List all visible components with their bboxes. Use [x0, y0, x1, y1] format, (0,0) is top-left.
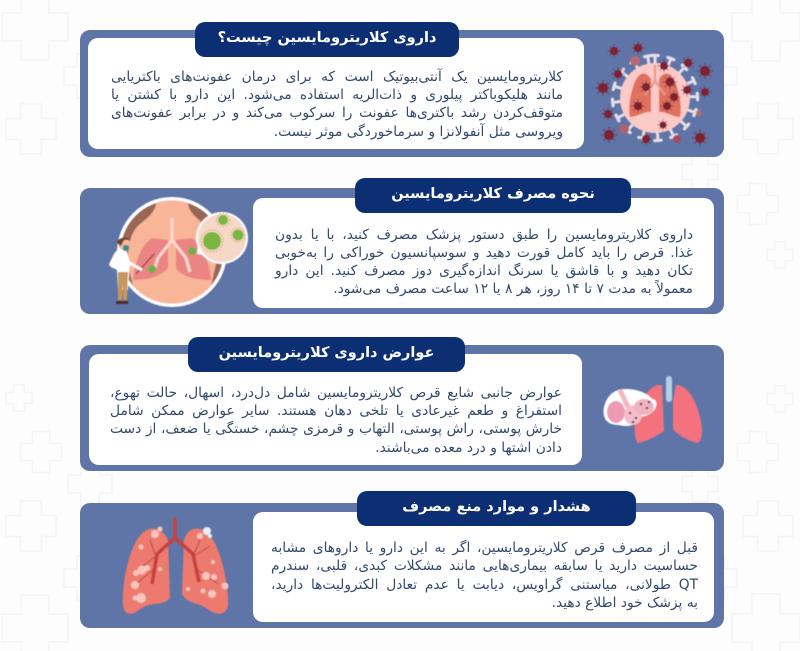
text block: warnings: حساسیت دارید یا سابقه بیماری‌هایی مانند مشکلات کبدی، قلبی، سندرم: [271, 558, 698, 574]
text card: side effects: [89, 354, 582, 465]
heading: what is clarithromycin: [195, 22, 459, 57]
text card: how to use: [253, 198, 714, 308]
heading: how to use: [355, 178, 631, 213]
text block: how to use: تکان دهید و با قاشق یا سرنگ اندازه‌گیری دوز مصرف کنید. این دارو: [275, 263, 693, 279]
text block: side effects: دادن اشتها و درد معده می‌باشند.: [375, 440, 562, 456]
heading: warnings and contraindications: هشدار و موارد منع مصرف: [402, 499, 591, 515]
panel: what is clarithromycin: [80, 30, 724, 157]
heading: how to use: نحوه مصرف کلاریترومایسین: [391, 186, 595, 202]
icon: lungs with alveoli detail: [602, 376, 703, 444]
text block: side effects: عوارض جانبی شایع قرص کلاریترومایسین شامل دل‌درد، اسهال، حالت تهوع،: [110, 385, 562, 401]
text block: what is clarithromycin: ویروسی مثل آنفولانزا و سرماخوردگی موثر نیست.: [274, 124, 563, 140]
panel: warnings and contraindications: [80, 503, 724, 628]
text block: how to use: غذا. قرص را باید کامل قورت دهید و سوسپانسیون خوراکی را به‌خوبی: [275, 245, 693, 261]
text block: what is clarithromycin: کلاریترومایسین یک آنتی‌بیوتیک است که برای درمان عفونت‌های باکتریایی: [111, 69, 563, 85]
icon: lungs with white spots: [122, 517, 230, 614]
text block: what is clarithromycin: مانند هلیکوباکتر پیلوری و ذات‌الریه استفاده می‌شود. این دارو با کشتن یا: [111, 87, 563, 103]
text block: side effects: استفراغ و طعم غیرعادی یا تلخی دهان هستند. سایر عوارض ممکن شامل: [110, 403, 562, 419]
text block: warnings: QT طولانی، میاستنی گراویس، دیابت یا عدم تعادل الکترولیت‌ها دارید،: [271, 577, 698, 593]
icon: doctor with lungs and virus magnifier: [108, 196, 249, 308]
text block: what is clarithromycin: متوقف‌کردن رشد باکتری‌ها عفونت را سرکوب می‌کند و در برابر عفونت‌های: [111, 105, 563, 121]
text block: warnings: قبل از مصرف قرص کلاریترومایسین، اگر به این دارو یا داروهای مشابه: [271, 540, 698, 556]
heading: warnings and contraindications: [357, 491, 636, 526]
icon: infected lungs with viruses: [594, 41, 714, 147]
heading: side effects: [188, 337, 465, 372]
heading: what is clarithromycin: داروی کلاریترومایسین چیست؟: [218, 30, 436, 46]
panel: side effects: [80, 345, 724, 471]
text card: warnings: [253, 512, 714, 622]
text block: warnings: [271, 540, 698, 611]
text block: side effects: خارش پوستی، راش پوستی، التهاب و قرمزی چشم، خستگی یا ضعف، از دست: [110, 421, 562, 437]
text block: side effects: [110, 385, 562, 456]
panel: how to use: [80, 188, 724, 314]
text block: how to use: داروی کلاریترومایسین را طبق دستور پزشک مصرف کنید، با یا بدون: [275, 227, 693, 243]
text block: warnings: به پزشک خود اطلاع دهید.: [552, 595, 698, 611]
text block: how to use: [274, 227, 693, 297]
text block: what is clarithromycin: [111, 68, 563, 140]
text block: how to use: معمولاً به مدت ۷ تا ۱۴ روز، هر ۸ یا ۱۲ ساعت مصرف می‌شود.: [333, 281, 693, 297]
text card: what is clarithromycin: [88, 38, 584, 149]
heading: side effects: عوارض داروی کلاریترومایسین: [219, 345, 434, 361]
